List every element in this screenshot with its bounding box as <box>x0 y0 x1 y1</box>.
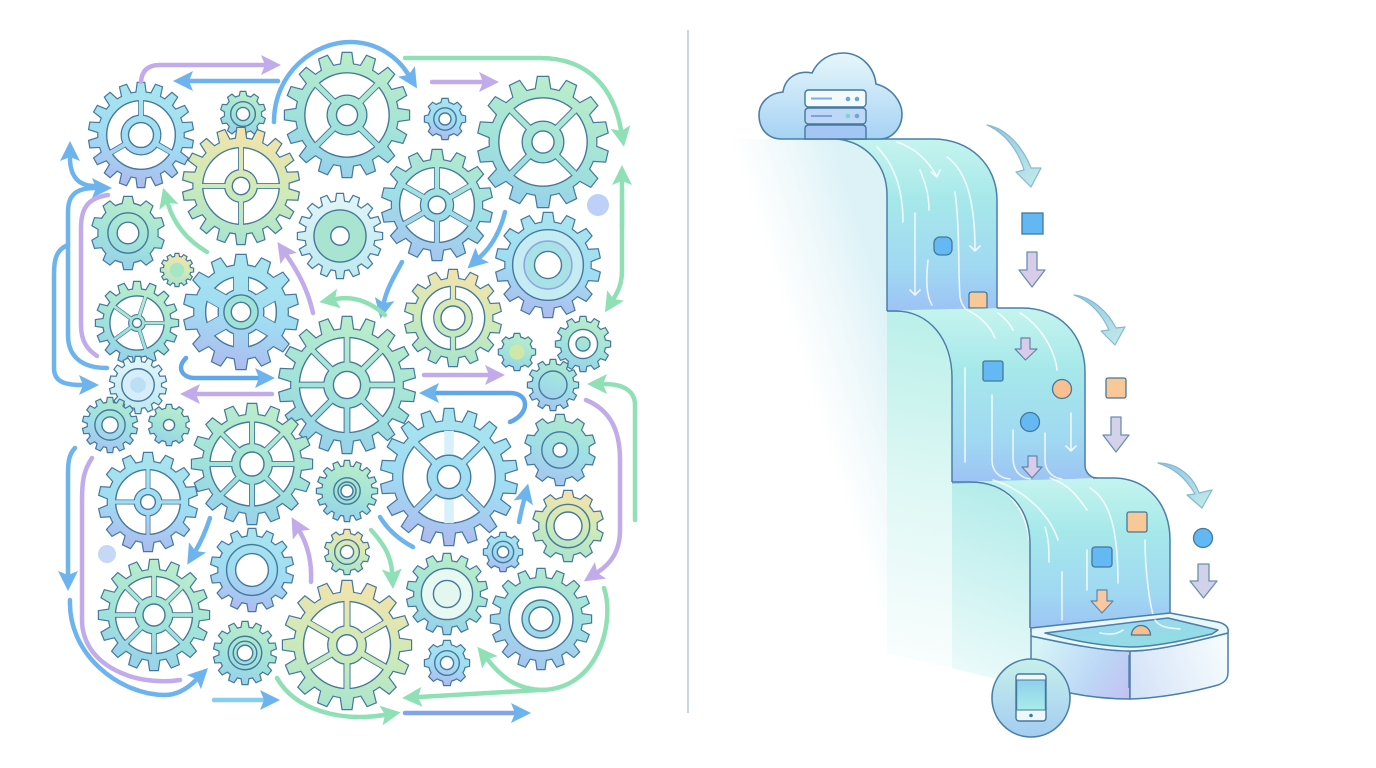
gear 16 <box>553 314 613 374</box>
arrow: blue hook right <box>181 358 258 378</box>
waterfall tier 2 <box>887 308 1097 484</box>
gear 8 <box>159 252 195 288</box>
gear 30 <box>482 531 524 573</box>
arrow: blue down <box>384 262 402 302</box>
arrow: bottom right green <box>419 588 607 697</box>
gear 26 <box>94 448 202 556</box>
arrow: green left <box>336 298 385 315</box>
arrow: lower left blue down <box>68 448 75 574</box>
icon: cloud server <box>759 53 902 139</box>
arrow: top blue leftward <box>190 79 278 83</box>
gear 14 <box>400 265 506 371</box>
arrow: outer left blue <box>54 245 82 385</box>
waterfall tier 1 <box>837 139 997 316</box>
gear 29 <box>323 528 371 576</box>
item: blue rounded square tier 1 <box>934 237 952 255</box>
gear 28 <box>207 525 297 615</box>
arrow: blue diagonal <box>480 212 505 257</box>
gear 7 <box>88 193 168 273</box>
gear 36 <box>423 639 471 687</box>
item: blue square tier 3 <box>1092 547 1112 567</box>
item: orange circle tier 2 <box>1052 380 1072 398</box>
gear 22 <box>186 398 318 530</box>
arrow: left blue inner <box>68 188 107 368</box>
gear 11 <box>491 208 605 322</box>
arrow: bottom green <box>277 678 384 717</box>
gear 31 <box>94 554 214 676</box>
gear 13 <box>178 249 304 375</box>
arrow: left purple <box>81 195 108 356</box>
arrow: lower left purple <box>82 458 180 681</box>
backdrop haze: lower <box>952 482 1030 682</box>
gear 6 <box>472 70 614 213</box>
arrow: green to gear 1 <box>168 204 207 252</box>
arrow: left blue upward <box>70 158 95 186</box>
arrow: orange down tier 3 <box>1091 590 1113 613</box>
arrow: small down lower tier 2 <box>1022 456 1042 478</box>
column 3: curved arrow, blue circle, down arrow <box>1158 463 1217 598</box>
arrow: top green <box>405 58 621 130</box>
gear 5 <box>423 97 467 141</box>
arrow: small down tier 2 <box>1015 338 1037 360</box>
item: blue square tier 2 <box>983 361 1003 381</box>
arrow: bottom short blue <box>214 698 263 702</box>
arrow: right purple <box>586 400 620 572</box>
column 1: curved arrow, blue square, down arrow <box>987 125 1045 287</box>
arrow: large blue arc <box>274 42 408 122</box>
gear 17 <box>272 310 422 460</box>
arrow: top purple <box>141 65 264 82</box>
gear 2 <box>219 90 267 138</box>
arrow: bottom blue right <box>405 711 514 715</box>
gear 21 <box>147 403 191 447</box>
gear 9 <box>294 190 386 282</box>
gear 20 <box>80 395 140 455</box>
column 2: curved arrow, orange square, down arrow <box>1074 295 1129 452</box>
dot: right <box>587 194 609 216</box>
arrow: blue lower <box>196 518 210 550</box>
divider <box>687 30 689 713</box>
gear 35 <box>277 575 417 715</box>
gear 24 <box>522 412 598 488</box>
gear 10 <box>376 144 498 266</box>
gear 34 <box>211 619 279 687</box>
gear 15 <box>497 332 537 372</box>
waterfall tier 3 <box>952 478 1180 632</box>
arc: blue under gear 23 <box>380 517 413 547</box>
arrow: blue hook left <box>436 393 525 422</box>
dot: left <box>98 545 116 563</box>
gear 18 <box>107 354 169 416</box>
item: blue circle tier 2 <box>1020 412 1040 432</box>
arrow: bottom right green branch <box>488 660 545 690</box>
gear 32 <box>403 550 491 638</box>
gear 23 <box>374 402 524 552</box>
arrow: right green down <box>614 200 622 298</box>
backdrop haze: middle <box>887 311 952 668</box>
arrow: top short purple <box>432 80 482 84</box>
arrow: right green left <box>604 384 635 520</box>
item: orange square tier 1 <box>969 292 987 308</box>
arrow: purple right <box>424 373 488 377</box>
gear 25 <box>314 458 380 524</box>
arrow: purple left <box>197 392 272 396</box>
arrow: purple up <box>300 532 311 582</box>
panel: waterfall <box>725 53 1228 737</box>
gear 3 <box>177 122 305 250</box>
arrow: lower left blue curve <box>70 600 196 695</box>
arrow: blue up <box>519 500 524 522</box>
basin <box>1031 613 1228 699</box>
gear 12 <box>92 278 182 368</box>
gear 1 <box>84 78 198 192</box>
gear 4 <box>279 47 415 183</box>
backdrop haze: upper <box>725 139 887 653</box>
gear 19 <box>526 358 580 412</box>
item: orange square tier 3 <box>1127 512 1147 532</box>
gear 27 <box>530 488 606 564</box>
arrow: right green up <box>620 182 624 228</box>
gear 33 <box>486 564 596 674</box>
arrow: green down <box>371 530 392 572</box>
arrows: tangled flows around gears <box>54 42 635 717</box>
icon: phone in circle <box>992 659 1070 737</box>
arrow: purple to gear 13 <box>287 256 313 313</box>
panel: tangled gears <box>80 47 615 715</box>
